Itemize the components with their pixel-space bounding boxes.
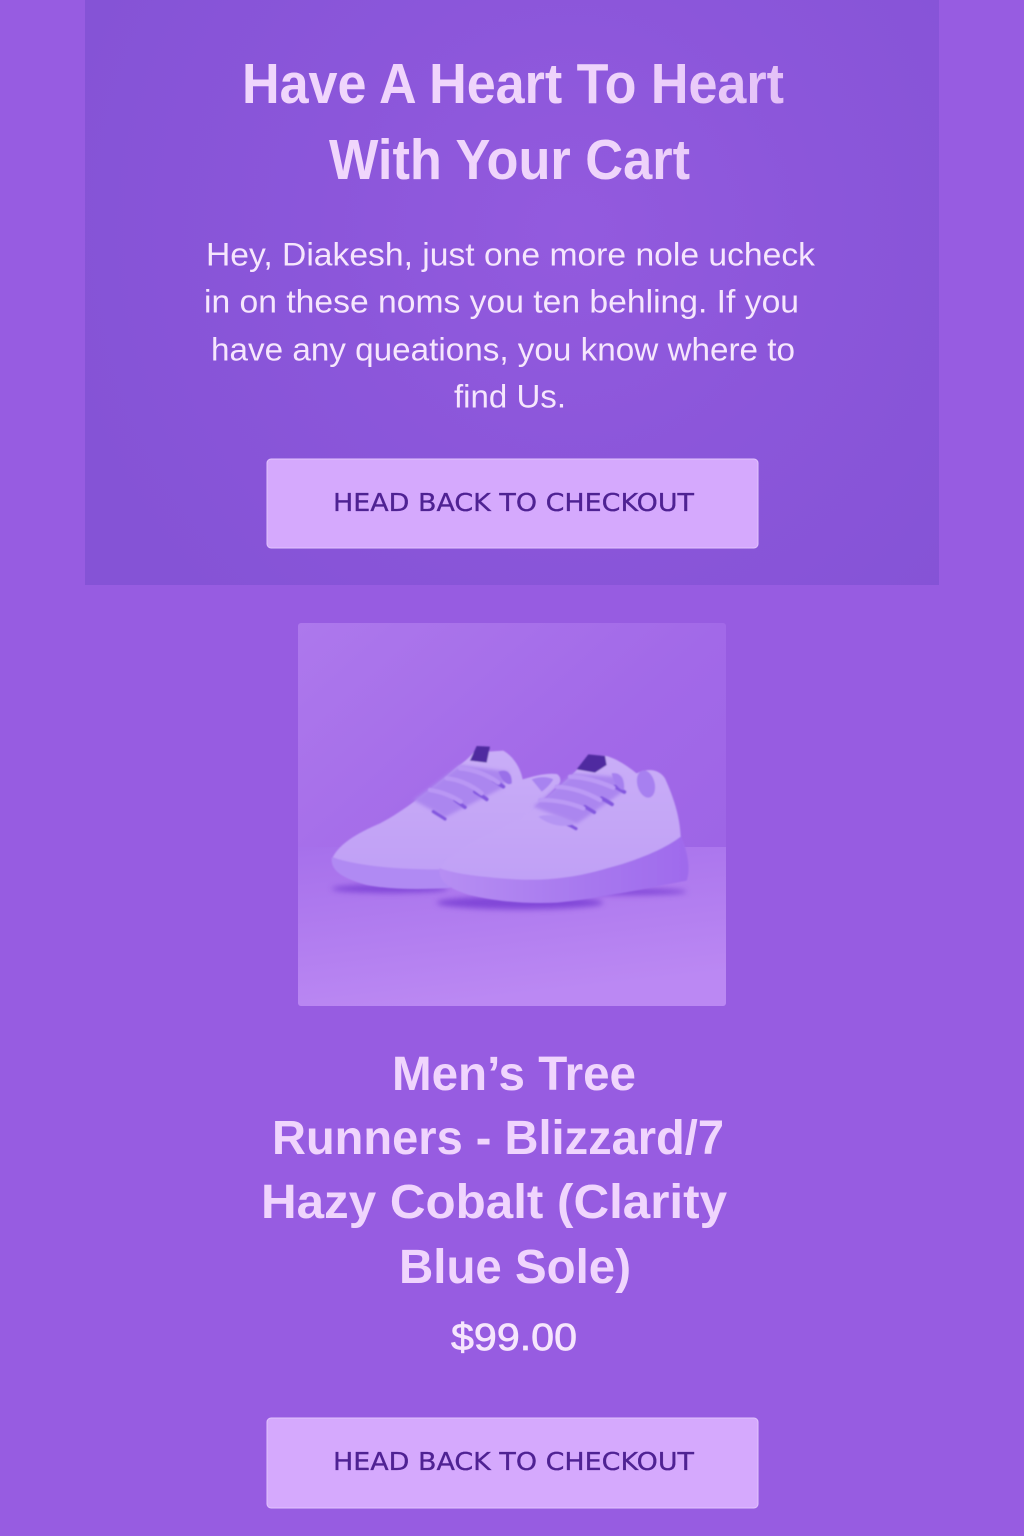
heading [242,52,784,192]
laces [413,765,508,817]
heading: With Your Cart [329,128,690,192]
product image: shoes [298,623,726,1006]
left shoe [332,746,560,889]
laces [533,773,622,824]
panel: cart message [85,0,939,585]
body text [204,236,816,414]
button: head back to checkout (bottom) [267,1418,758,1508]
body text: in on these noms you ten behling. If you [204,284,799,320]
button: head back to checkout (top) [267,459,758,548]
product title: Blue Sole) [399,1241,631,1294]
icon: pair of running shoes [332,746,689,909]
button: head back to checkout (bottom): HEAD BACK TO CHECKOUT [333,1447,695,1476]
price: $99.00 [451,1317,577,1359]
product title: Runners - Blizzard/7 [272,1112,724,1165]
body text: find Us. [454,378,566,414]
button: head back to checkout (top): HEAD BACK TO CHECKOUT [333,488,695,517]
right shoe [439,754,689,903]
product title [261,1048,727,1294]
body text: have any queations, you know where to [211,332,795,368]
shoe shadows [332,884,687,909]
product title: Men’s Tree [392,1048,636,1101]
product title: Hazy Cobalt (Clarity [261,1176,727,1229]
body text: Hey, Diakesh, just one more nole ucheck [206,236,816,272]
heading: Have A Heart To Heart [242,52,784,116]
